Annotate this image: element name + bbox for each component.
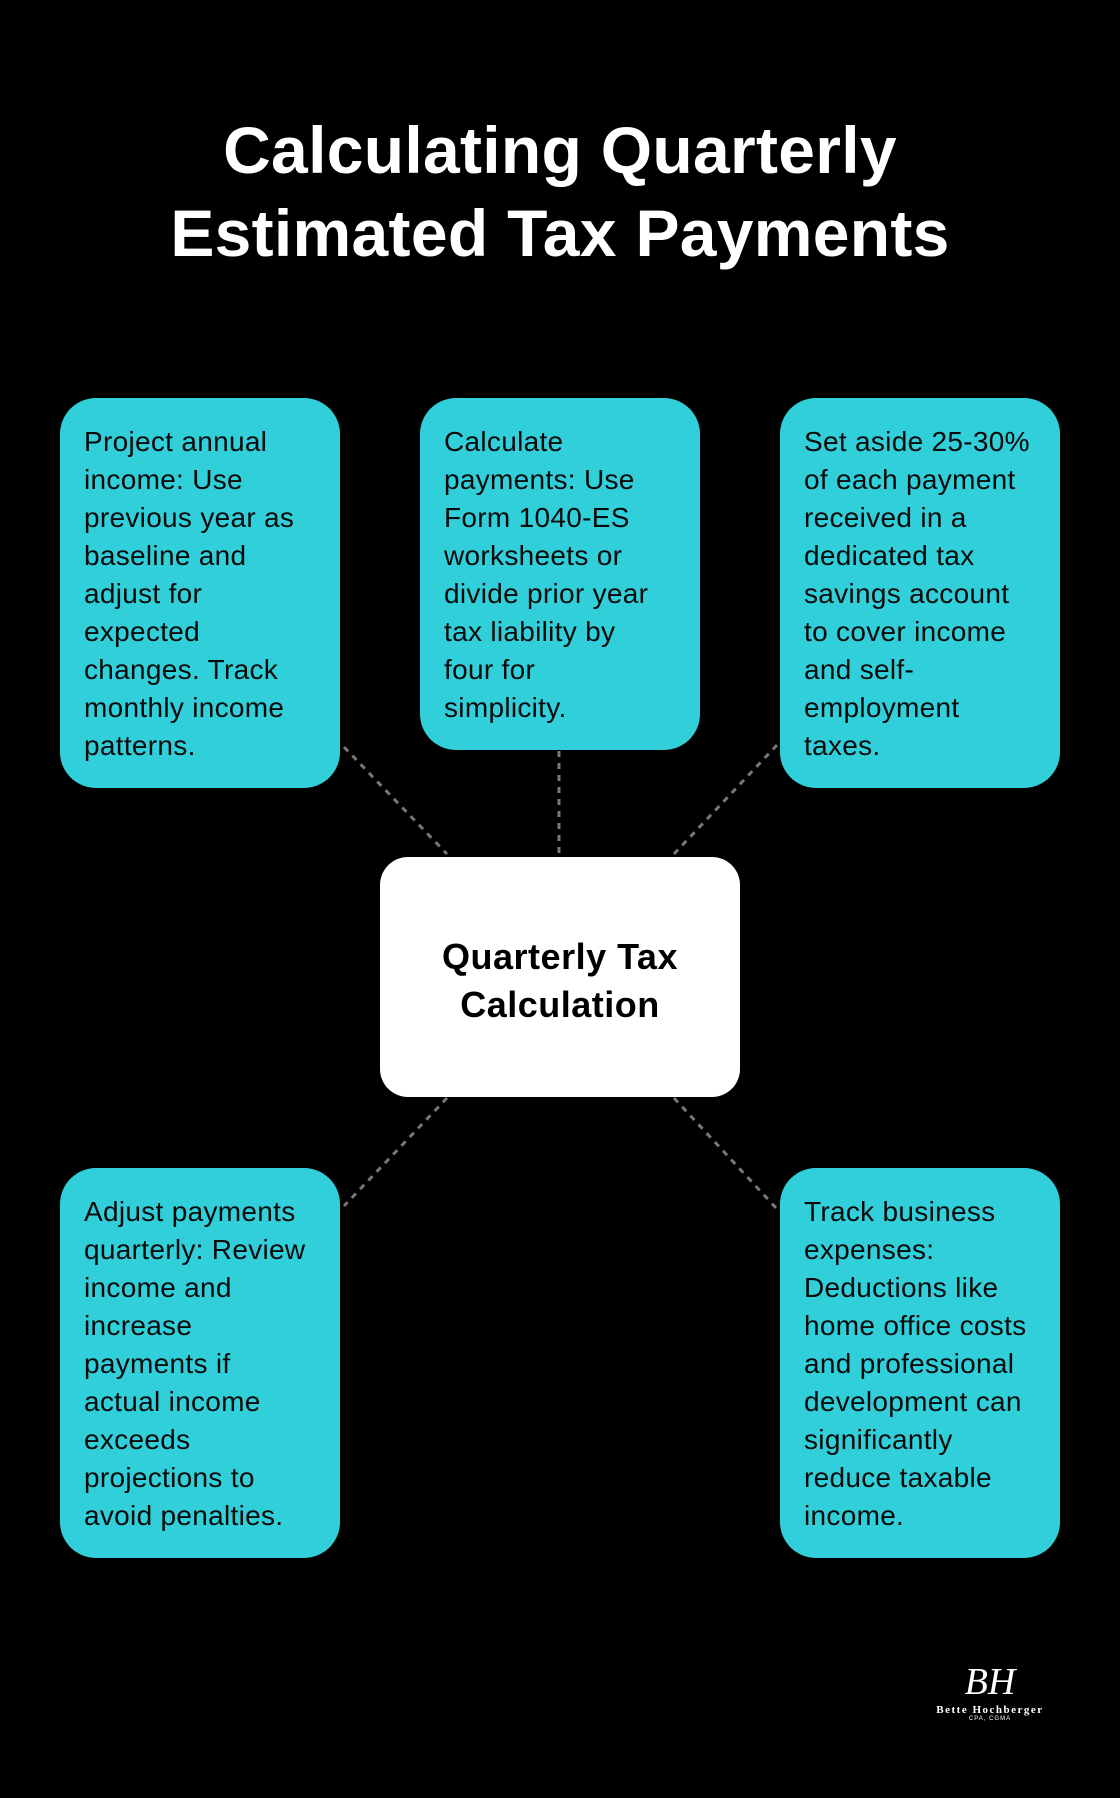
center node: Calculation	[460, 984, 660, 1025]
panel: adjust payments: payments if	[84, 1348, 230, 1379]
panel: set aside: taxes.	[804, 730, 881, 761]
panel: track expenses	[780, 1168, 1060, 1558]
panel: track expenses: income.	[804, 1500, 904, 1531]
title: Calculating Quarterly	[223, 113, 897, 187]
panel: track expenses: significantly	[804, 1424, 953, 1455]
logo: Bette Hochberger	[936, 1704, 1044, 1716]
panel: set aside: to cover income	[804, 616, 1006, 647]
panel: calculate payments: Calculate	[444, 426, 563, 457]
panel: set aside: and self-	[804, 654, 914, 685]
panel: track expenses: reduce taxable	[804, 1462, 992, 1493]
panel: track expenses: development can	[804, 1386, 1022, 1417]
panel: adjust payments: actual income	[84, 1386, 261, 1417]
panel: project annual income: Project annual	[84, 426, 267, 457]
panel: calculate payments: worksheets or	[444, 540, 622, 571]
panel: adjust payments: avoid penalties.	[84, 1500, 283, 1531]
panel: adjust payments: projections to	[84, 1462, 255, 1493]
panel: track expenses: home office costs	[804, 1310, 1026, 1341]
panel: set aside: received in a	[804, 502, 967, 533]
panel: calculate payments: tax liability by	[444, 616, 615, 647]
panel: adjust payments: income and	[84, 1272, 232, 1303]
logo: BH	[965, 1661, 1015, 1703]
title	[170, 113, 950, 270]
panel: track expenses: expenses:	[804, 1234, 934, 1265]
panel: project annual income: changes. Track	[84, 654, 278, 685]
panel: set aside: employment	[804, 692, 960, 723]
panel: track expenses: Deductions like	[804, 1272, 998, 1303]
panel: calculate payments: simplicity.	[444, 692, 567, 723]
center node: Quarterly Tax	[442, 936, 678, 977]
panel: set aside: Set aside 25-30%	[804, 426, 1030, 457]
panel: adjust payments: Adjust payments	[84, 1196, 296, 1227]
logo	[936, 1661, 1044, 1722]
panel: adjust payments: exceeds	[84, 1424, 190, 1455]
panel: calculate payments: payments: Use	[444, 464, 635, 495]
title: Estimated Tax Payments	[170, 196, 950, 270]
panel: set aside: dedicated tax	[804, 540, 974, 571]
panel: set aside: of each payment	[804, 464, 1016, 495]
panel: project annual income	[60, 398, 340, 788]
panel: project annual income: income: Use	[84, 464, 243, 495]
panel: set aside	[780, 398, 1060, 788]
panel: set aside: savings account	[804, 578, 1009, 609]
panel: calculate payments: divide prior year	[444, 578, 648, 609]
panel: adjust payments	[60, 1168, 340, 1558]
panel: project annual income: patterns.	[84, 730, 196, 761]
panel: project annual income: monthly income	[84, 692, 284, 723]
center node	[380, 857, 740, 1097]
panel: adjust payments: increase	[84, 1310, 192, 1341]
panel: track expenses: and professional	[804, 1348, 1014, 1379]
panel: calculate payments	[420, 398, 700, 750]
panel: project annual income: baseline and	[84, 540, 246, 571]
panel: project annual income: adjust for	[84, 578, 202, 609]
panel: project annual income: previous year as	[84, 502, 294, 533]
panel: calculate payments: Form 1040-ES	[444, 502, 630, 533]
panel: project annual income: expected	[84, 616, 200, 647]
logo: CPA, CGMA	[969, 1716, 1011, 1722]
panel: adjust payments: quarterly: Review	[84, 1234, 305, 1265]
panel: track expenses: Track business	[804, 1196, 995, 1227]
panel: calculate payments: four for	[444, 654, 535, 685]
